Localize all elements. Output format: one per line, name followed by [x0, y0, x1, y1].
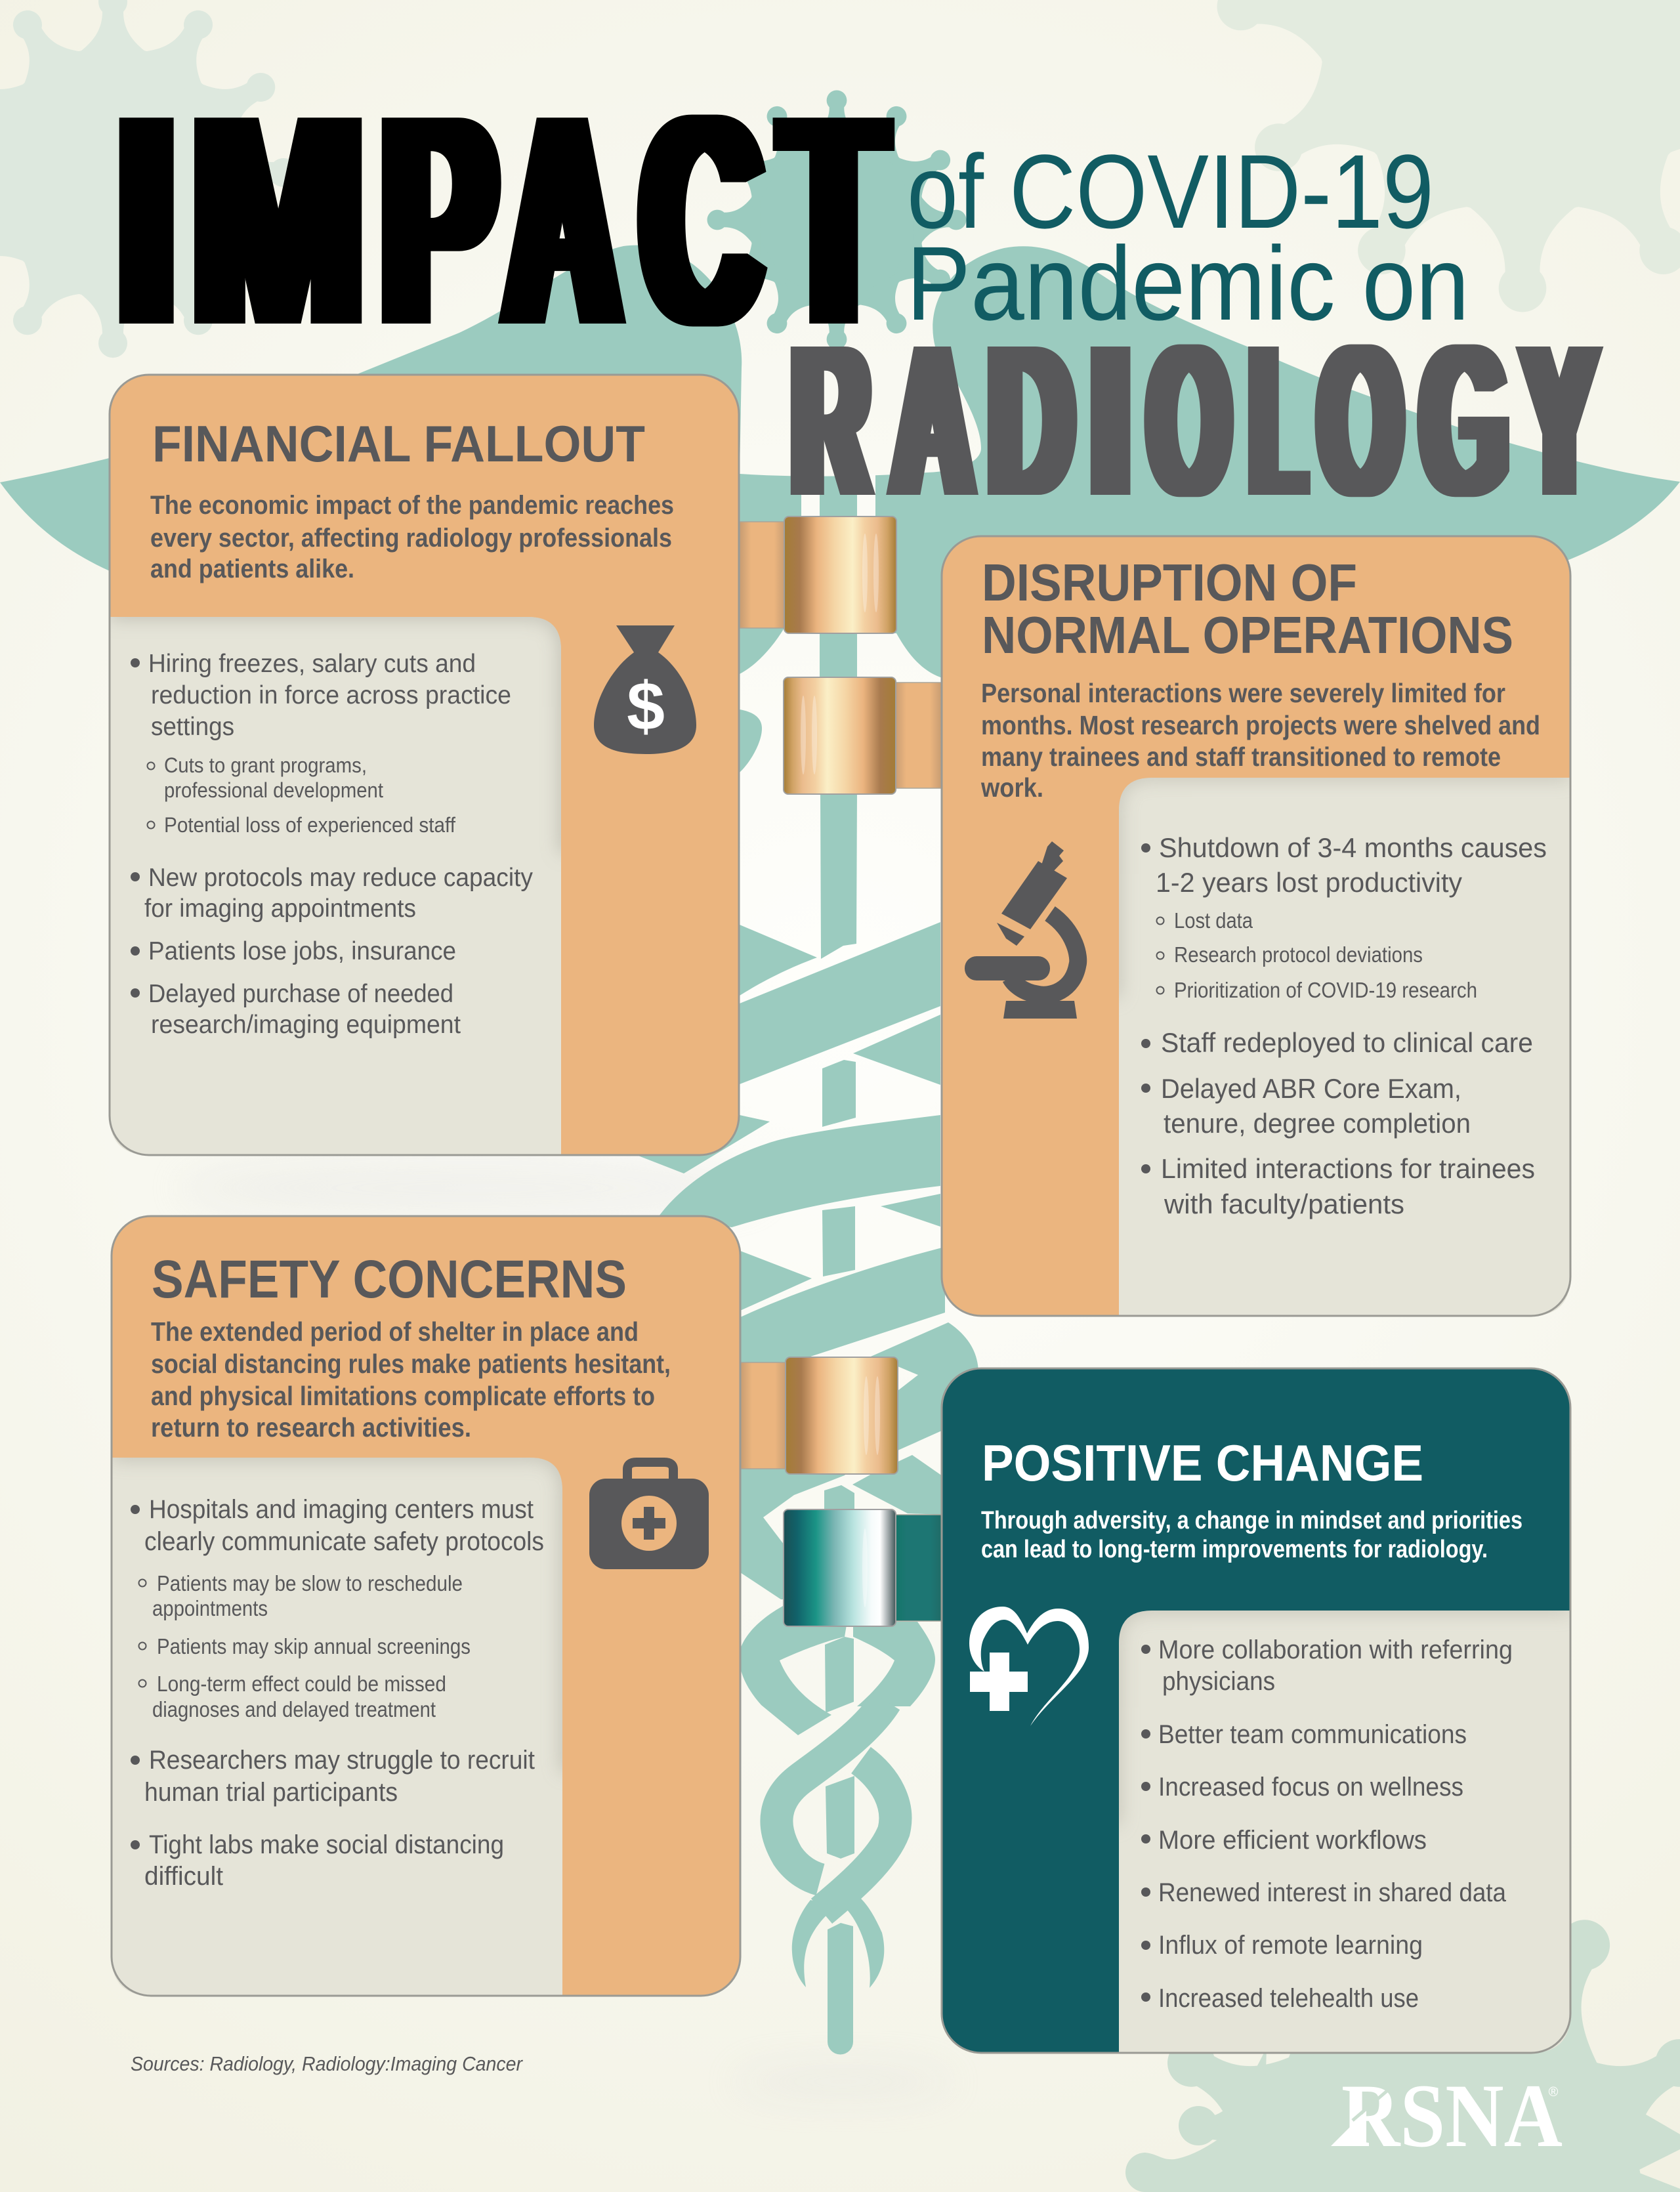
connector band: positive change: [784, 1509, 942, 1626]
bullet list: financial fallout: [131, 650, 533, 1039]
intertwined serpents: [776, 1701, 895, 1911]
bullet list: safety: Tight labs make social distancing: [149, 1830, 504, 1859]
intro text: disruption: Personal interactions were severely limited for: [981, 678, 1505, 708]
bullet list: safety: diagnoses and delayed treatment: [152, 1697, 436, 1721]
heading: financial fallout: FINANCIAL FALLOUT: [152, 415, 645, 473]
bullet list: safety: human trial participants: [144, 1778, 398, 1807]
title word: IMPACT: T: [784, 53, 884, 387]
title word: RADIOLOGY: L: [1251, 300, 1304, 541]
intro text: financial fallout: and patients alike.: [150, 555, 354, 583]
intro text: financial fallout: every sector, affecting radiology professionals: [150, 524, 672, 553]
bullet list: financial fallout: research/imaging equipment: [151, 1011, 461, 1039]
bullet list: safety: appointments: [152, 1596, 268, 1620]
intro text: disruption: work.: [980, 772, 1043, 803]
panel body: disruption: [1119, 778, 1570, 1316]
icon: microscope: [965, 841, 1078, 1019]
bullet list: safety: [131, 1495, 544, 1891]
bullet list: financial fallout: Delayed purchase of needed: [148, 980, 453, 1008]
background virus: top right: [1216, 0, 1680, 313]
bullet list: financial fallout: professional development: [164, 778, 383, 802]
intro text: positive change: Through adversity, a change in mindset and priorities: [981, 1507, 1522, 1534]
panel: safety concerns: [112, 1216, 740, 1996]
panel body: safety: [112, 1458, 562, 1996]
connector band: financial fallout: [740, 516, 896, 633]
heading: disruption: NORMAL OPERATIONS: [982, 606, 1513, 664]
bullet list: positive change: Increased focus on wellness: [1158, 1773, 1463, 1802]
bullet list: positive change: Better team communications: [1158, 1720, 1467, 1749]
white slits beside the staff: [801, 474, 875, 517]
bullet list: financial fallout: Potential loss of experienced staff: [164, 813, 455, 837]
background virus: bottom right: [1125, 1878, 1680, 2192]
title word: IMPACT: P: [383, 53, 494, 387]
sources note: Sources: Radiology, Radiology:Imaging Cancer: [131, 2052, 524, 2075]
bullet list: disruption: Delayed ABR Core Exam,: [1161, 1073, 1461, 1104]
title word: RADIOLOGY: G: [1421, 300, 1507, 541]
panel body: positive change: [1119, 1611, 1570, 2053]
bullet list: disruption: Research protocol deviations: [1174, 942, 1423, 967]
bullet list: financial fallout: Cuts to grant programs,: [164, 753, 367, 777]
title word: RADIOLOGY: O: [1149, 300, 1229, 541]
bullet list: disruption: with faculty/patients: [1164, 1189, 1404, 1219]
title word: RADIOLOGY: I: [1090, 300, 1131, 541]
title word: RADIOLOGY: A: [892, 300, 972, 541]
heading: disruption: DISRUPTION OF: [982, 553, 1357, 612]
serpent tail: left: [792, 1900, 837, 1987]
title word: IMPACT: I: [118, 53, 175, 387]
icon: money bag: $: [627, 669, 665, 745]
staff and helix: [637, 627, 978, 2054]
bullet list: financial fallout: Hiring freezes, salary cuts and: [148, 650, 476, 678]
intro text: safety: and physical limitations complicate efforts to: [151, 1381, 655, 1411]
bullet list: disruption: Shutdown of 3-4 months causes: [1159, 832, 1547, 863]
bullet list: positive change: [1141, 1635, 1513, 2013]
intro text: disruption: [980, 678, 1540, 803]
bullet list: financial fallout: New protocols may reduce capacity: [148, 864, 533, 892]
intro text: disruption: months. Most research projects were shelved and: [981, 710, 1540, 740]
bullet list: disruption: tenure, degree completion: [1164, 1108, 1471, 1139]
title word: IMPACT: M: [193, 53, 363, 387]
bullet list: positive change: Increased telehealth use: [1158, 1984, 1419, 2013]
bullet list: financial fallout: settings: [151, 713, 234, 741]
intro text: disruption: many trainees and staff transitioned to remote: [981, 742, 1501, 772]
intro text: positive change: [981, 1507, 1522, 1563]
panel: financial fallout: [110, 375, 739, 1155]
serpent tail: right: [846, 1897, 884, 1988]
title word: RADIOLOGY: O: [1320, 300, 1401, 541]
icon: money bag: [594, 625, 696, 754]
intro text: safety: The extended period of shelter in place and: [151, 1317, 639, 1347]
title: Pandemic on: Pandemic on: [906, 224, 1469, 342]
intro text: safety: [151, 1317, 671, 1443]
intro text: financial fallout: The economic impact of the pandemic reaches: [150, 491, 674, 520]
RSNA logo: RSNA: [1341, 2065, 1563, 2166]
connector band: safety: [740, 1357, 898, 1474]
intro text: positive change: can lead to long-term improvements for radiology.: [981, 1536, 1488, 1563]
bullet list: financial fallout: reduction in force across practice: [151, 681, 511, 709]
bullet list: positive change: physicians: [1162, 1667, 1275, 1696]
bullet list: positive change: Renewed interest in shared data: [1158, 1878, 1507, 1907]
bullet list: positive change: Influx of remote learning: [1158, 1931, 1423, 1960]
bullet list: safety: Patients may skip annual screenings: [157, 1634, 471, 1658]
heading: safety: SAFETY CONCERNS: [152, 1250, 627, 1309]
heading: positive change: POSITIVE CHANGE: [982, 1434, 1423, 1492]
soft shadows: [177, 1155, 955, 2099]
bullet list: positive change: More efficient workflows: [1158, 1826, 1427, 1855]
caduceus wings: [0, 245, 1680, 681]
bullet list: financial fallout: for imaging appointments: [144, 895, 416, 923]
bullet list: disruption: 1-2 years lost productivity: [1156, 867, 1462, 898]
bullet list: safety: Researchers may struggle to recruit: [149, 1746, 535, 1775]
intro text: safety: return to research activities.: [151, 1412, 471, 1443]
title word: RADIOLOGY: R: [793, 300, 868, 541]
title word: RADIOLOGY: D: [989, 300, 1073, 541]
bullet list: disruption: Prioritization of COVID-19 research: [1174, 978, 1477, 1002]
bullet list: safety: clearly communicate safety protocols: [144, 1527, 544, 1556]
bullet list: safety: Patients may be slow to reschedule: [157, 1571, 463, 1595]
background virus: top left: [0, 0, 299, 358]
bullet list: disruption: Staff redeployed to clinical care: [1161, 1027, 1533, 1058]
connector band: disruption: [784, 677, 942, 794]
panel body: financial fallout: [110, 617, 561, 1155]
bullet list: safety: difficult: [144, 1862, 223, 1891]
title word: IMPACT: C: [642, 53, 759, 387]
bullet list: positive change: More collaboration with referring: [1158, 1635, 1513, 1664]
bullet list: disruption: Lost data: [1174, 908, 1253, 933]
title word: IMPACT: A: [507, 53, 618, 387]
bullet list: financial fallout: Patients lose jobs, insurance: [148, 937, 456, 965]
background virus: behind title: [707, 90, 967, 350]
title word: RADIOLOGY: Y: [1522, 300, 1596, 541]
intro text: safety: social distancing rules make patients hesitant,: [151, 1349, 671, 1379]
bullet list: disruption: Limited interactions for trainees: [1161, 1153, 1535, 1184]
icon: medical kit: [589, 1462, 709, 1569]
RSNA logo: ®: [1549, 2085, 1559, 2099]
bullet list: safety: Long-term effect could be missed: [157, 1672, 446, 1696]
panel: disruption of normal operations: [942, 536, 1570, 1316]
title: of COVID-19: of COVID-19: [907, 133, 1434, 250]
bullet list: disruption: [1141, 832, 1547, 1219]
panel: positive change: [942, 1368, 1570, 2053]
bullet list: safety: Hospitals and imaging centers must: [149, 1495, 534, 1524]
intro text: financial fallout: [150, 491, 674, 583]
heading: disruption: [982, 553, 1513, 664]
icon: heart with medical cross: [969, 1607, 1089, 1726]
